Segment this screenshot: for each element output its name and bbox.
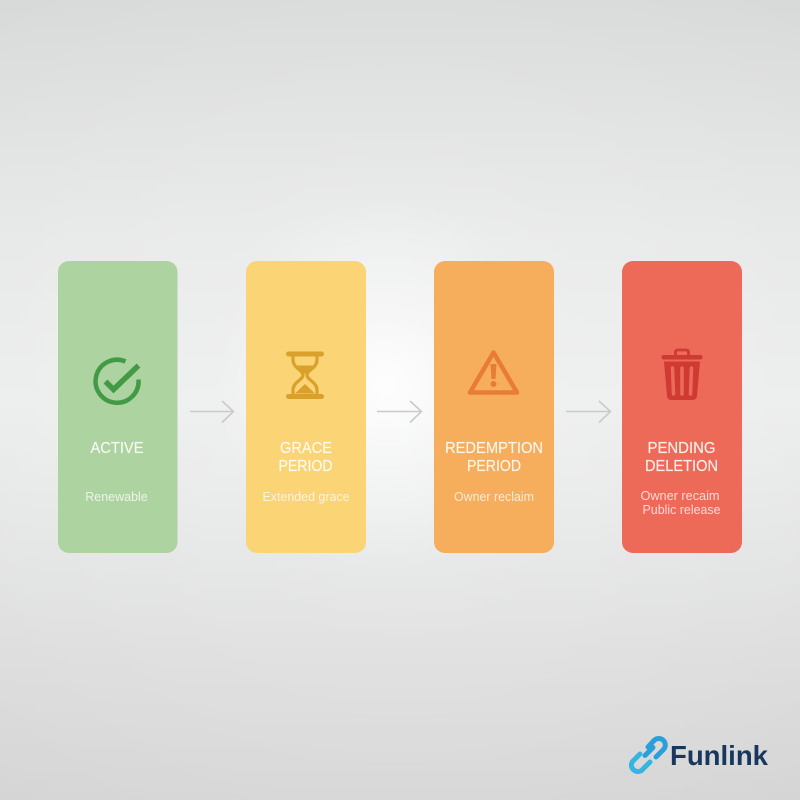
- icon: trash can: [662, 350, 702, 400]
- heading: redemption period: REDEMPTION: [445, 440, 543, 457]
- heading: grace period: GRACE: [280, 440, 332, 457]
- text: owner recaim, public release: [640, 489, 721, 517]
- text: owner recaim, public release: Public release: [642, 503, 721, 517]
- panel: grace period: [246, 261, 366, 553]
- text: owner recaim, public release: Owner recaim: [640, 489, 720, 503]
- icon: check circle: [96, 360, 139, 403]
- heading: pending deletion: PENDING: [648, 440, 716, 457]
- arrow 1: [190, 401, 234, 422]
- heading: active: ACTIVE: [90, 440, 144, 457]
- panel: pending deletion: [622, 261, 742, 553]
- text: renewable: Renewable: [85, 490, 148, 504]
- text: owner reclaim: Owner reclaim: [454, 490, 534, 504]
- icon: hourglass: [288, 354, 322, 396]
- icon: warning triangle: [470, 352, 517, 392]
- icon: chain link: [631, 738, 665, 772]
- panel: redemption period: PERIOD: [467, 458, 521, 475]
- wordmark: Funlink: [670, 740, 768, 771]
- arrow 2: [377, 401, 422, 422]
- arrow 3: [566, 401, 610, 422]
- panel: pending deletion: DELETION: [645, 458, 718, 475]
- panel: grace period: PERIOD: [278, 458, 332, 475]
- panel: active: [58, 261, 178, 553]
- text: extended grace: Extended grace: [262, 490, 350, 504]
- panel: redemption period: [434, 261, 554, 553]
- logo: funlink: [631, 738, 768, 772]
